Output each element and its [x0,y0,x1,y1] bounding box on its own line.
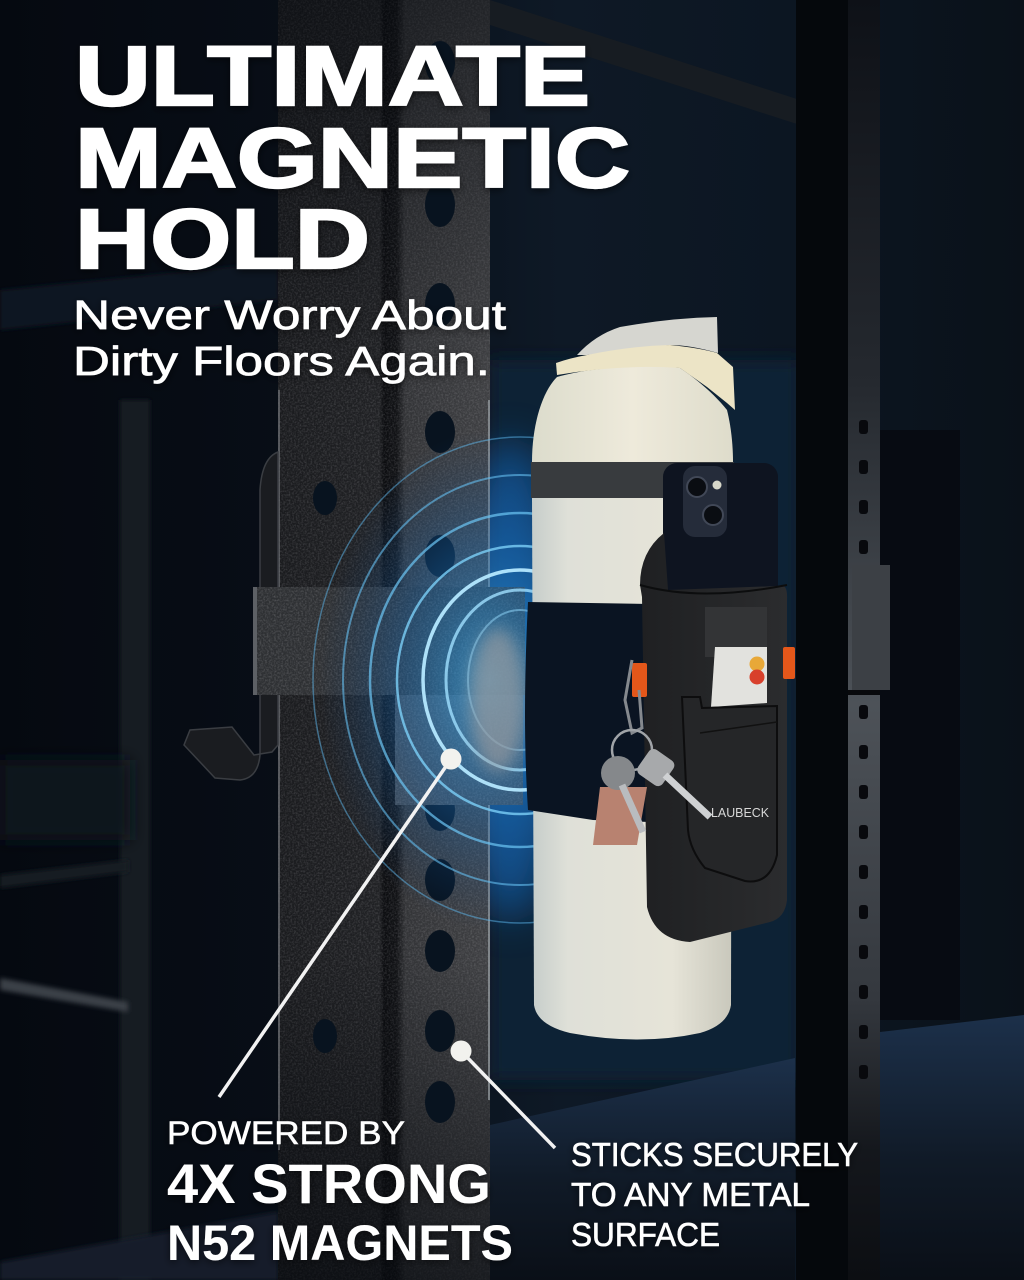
headline [75,29,630,286]
keys and carabiner [593,660,710,845]
black strap [525,602,650,822]
callout line: magnets [219,748,462,1097]
subheading: Dirty Floors Again. [73,338,490,384]
callout line: metal surface [450,1040,555,1148]
phone pouch [632,533,795,942]
callout text: magnets [167,1115,513,1271]
hook bracket [184,452,525,805]
headline: HOLD [75,192,370,286]
subheading: Never Worry About [73,292,507,338]
bottle band [531,462,734,498]
orange tabs [632,647,795,697]
bottle lid [556,317,735,410]
bottle dome [532,366,733,462]
magnetic wave rings [313,430,727,930]
headline: MAGNETIC [75,111,630,205]
front pocket [682,697,777,881]
left rack post with holes [278,0,490,1280]
callout text: metal surface: STICKS SECURELY [571,1136,858,1173]
phone [663,463,778,598]
subheading [73,292,507,384]
callout text: metal surface [571,1136,858,1253]
payment card [711,647,767,707]
brand label: LAUBECK [711,806,770,820]
headline: ULTIMATE [75,29,590,123]
callout text: metal surface: TO ANY METAL [571,1176,810,1213]
callout text: magnets: N52 MAGNETS [167,1215,513,1271]
callout text: magnets: POWERED BY [167,1115,405,1151]
callout text: magnets: 4X STRONG [167,1152,491,1215]
water bottle [525,317,735,1040]
callout text: metal surface: SURFACE [571,1216,720,1253]
right rack upright [796,0,890,1280]
blue glow behind bottle [460,440,560,920]
